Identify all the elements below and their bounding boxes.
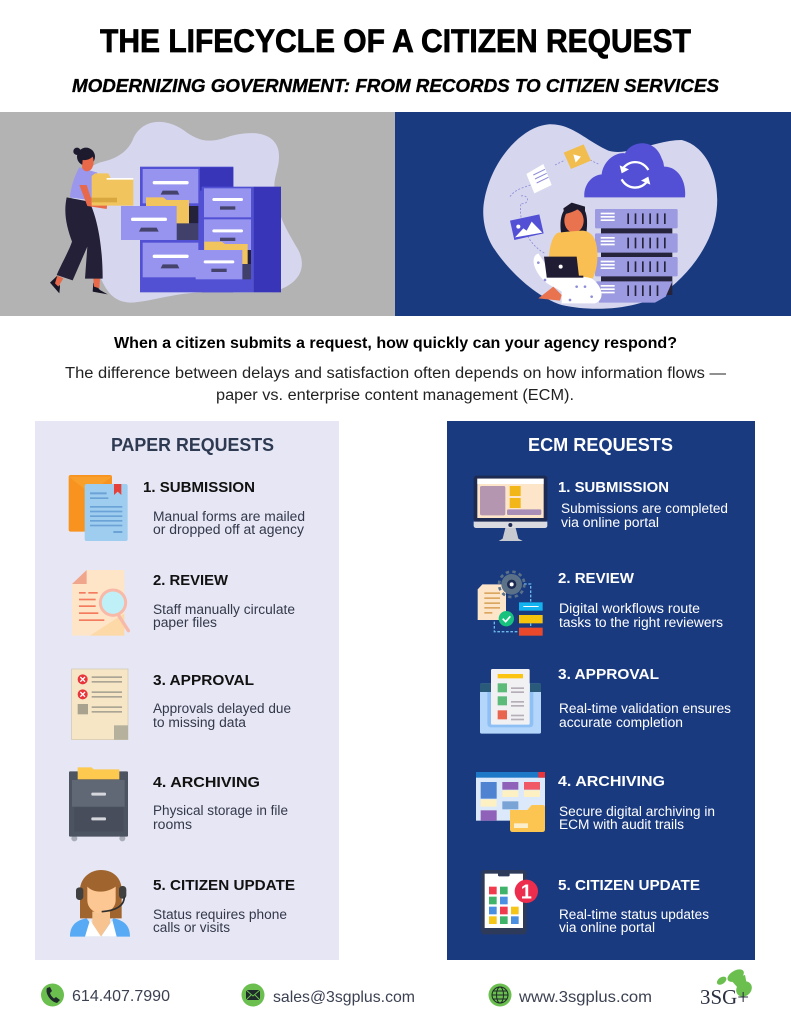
- hero panel: paper records illustration: [0, 112, 395, 316]
- paper step 1: submission: 1. SUBMISSION: [143, 479, 255, 496]
- panel: ECM requests: [447, 421, 755, 960]
- ECM step 5: citizen update: Real-time status updates: [559, 907, 709, 922]
- question heading: When a citizen submits a request, how quickly can your agency respond?: [114, 335, 677, 352]
- paper step 5: citizen update: calls or visits: [153, 920, 230, 935]
- ECM step 3: approval: Real-time validation ensures: [559, 701, 731, 716]
- paper step 5: citizen update: [70, 870, 295, 937]
- title: THE LIFECYCLE OF A CITIZEN REQUEST: [100, 23, 691, 59]
- ECM step 3: approval: accurate completion: [559, 715, 683, 730]
- server stack: [595, 209, 678, 303]
- paper step 1: submission: Manual forms are mailed: [153, 509, 305, 524]
- floating documents: [510, 144, 598, 253]
- subtitle: MODERNIZING GOVERNMENT: FROM RECORDS TO CITIZEN SERVICES: [72, 75, 719, 96]
- footer: phone: [41, 984, 170, 1006]
- hero panel: ECM cloud illustration: [395, 112, 791, 316]
- intro text: paper vs. enterprise content management (ECM).: [216, 387, 574, 404]
- person with laptop: [534, 203, 602, 303]
- paper step 2: review: Staff manually circulate: [153, 602, 295, 617]
- footer: email: [242, 984, 415, 1006]
- ECM step 1: submission: via online portal: [561, 515, 659, 530]
- footer: 3SG+ logo: [700, 967, 755, 1009]
- ECM step 4: archiving: ECM with audit trails: [559, 817, 684, 832]
- footer: website: www.3sgplus.com: [518, 989, 652, 1006]
- filing cabinet right: [196, 187, 281, 292]
- ECM step 2: review: 2. REVIEW: [558, 570, 635, 587]
- paper step 2: review: 2. REVIEW: [153, 572, 229, 589]
- panel: paper requests: [35, 421, 339, 960]
- woman carrying folder: [50, 148, 133, 294]
- ECM step 2: review: tasks to the right reviewers: [559, 615, 723, 630]
- ECM step 5: citizen update: 5. CITIZEN UPDATE: [558, 877, 700, 894]
- cloud sync icon: [584, 143, 685, 197]
- paper step 2: review: [72, 570, 295, 636]
- footer: 3SG+ logo: 3SG+: [700, 985, 749, 1009]
- intro text: The difference between delays and satisfaction often depends on how information flows —: [65, 365, 727, 382]
- paper step 1: submission: or dropped off at agency: [153, 522, 304, 537]
- footer: phone: 614.407.7990: [72, 988, 170, 1005]
- paper step 3: approval: [72, 669, 291, 740]
- paper step 5: citizen update: 5. CITIZEN UPDATE: [153, 877, 295, 894]
- paper step 4: archiving: rooms: [153, 817, 192, 832]
- paper step 3: approval: to missing data: [153, 715, 247, 730]
- ECM step 5: citizen update: [481, 870, 709, 935]
- ECM step 3: approval: 3. APPROVAL: [558, 666, 659, 683]
- paper step 3: approval: Approvals delayed due: [153, 701, 291, 716]
- ECM step 4: archiving: Secure digital archiving in: [559, 804, 715, 819]
- blob background: [72, 122, 302, 303]
- ECM step 1: submission: [474, 476, 728, 541]
- ECM step 4: archiving: [476, 772, 715, 832]
- ECM step 1: submission: Submissions are completed: [561, 501, 728, 516]
- intro text: [65, 365, 727, 404]
- paper step 1: submission: [69, 475, 305, 541]
- footer: email: sales@3sgplus.com: [273, 989, 415, 1006]
- ECM step 5: citizen update: 1: [521, 882, 532, 904]
- paper step 2: review: paper files: [153, 615, 217, 630]
- ECM step 3: approval: [480, 666, 731, 734]
- ECM step 5: citizen update: via online portal: [559, 920, 655, 935]
- ECM panel heading: ECM REQUESTS: [528, 434, 673, 455]
- ECM step 1: submission: 1. SUBMISSION: [558, 479, 669, 496]
- paper step 4: archiving: 4. ARCHIVING: [153, 774, 260, 791]
- paper step 3: approval: 3. APPROVAL: [153, 672, 254, 689]
- blob background: [483, 124, 717, 309]
- ECM step 2: review: Digital workflows route: [559, 601, 700, 616]
- paper panel heading: PAPER REQUESTS: [111, 434, 274, 455]
- filing cabinet left: [121, 167, 233, 292]
- paper step 4: archiving: Physical storage in file: [153, 803, 288, 818]
- ECM step 2: review: [478, 570, 723, 636]
- paper step 4: archiving: [69, 767, 288, 841]
- paper step 5: citizen update: Status requires phone: [153, 907, 287, 922]
- footer: website: [488, 984, 652, 1006]
- ECM step 4: archiving: 4. ARCHIVING: [558, 773, 665, 790]
